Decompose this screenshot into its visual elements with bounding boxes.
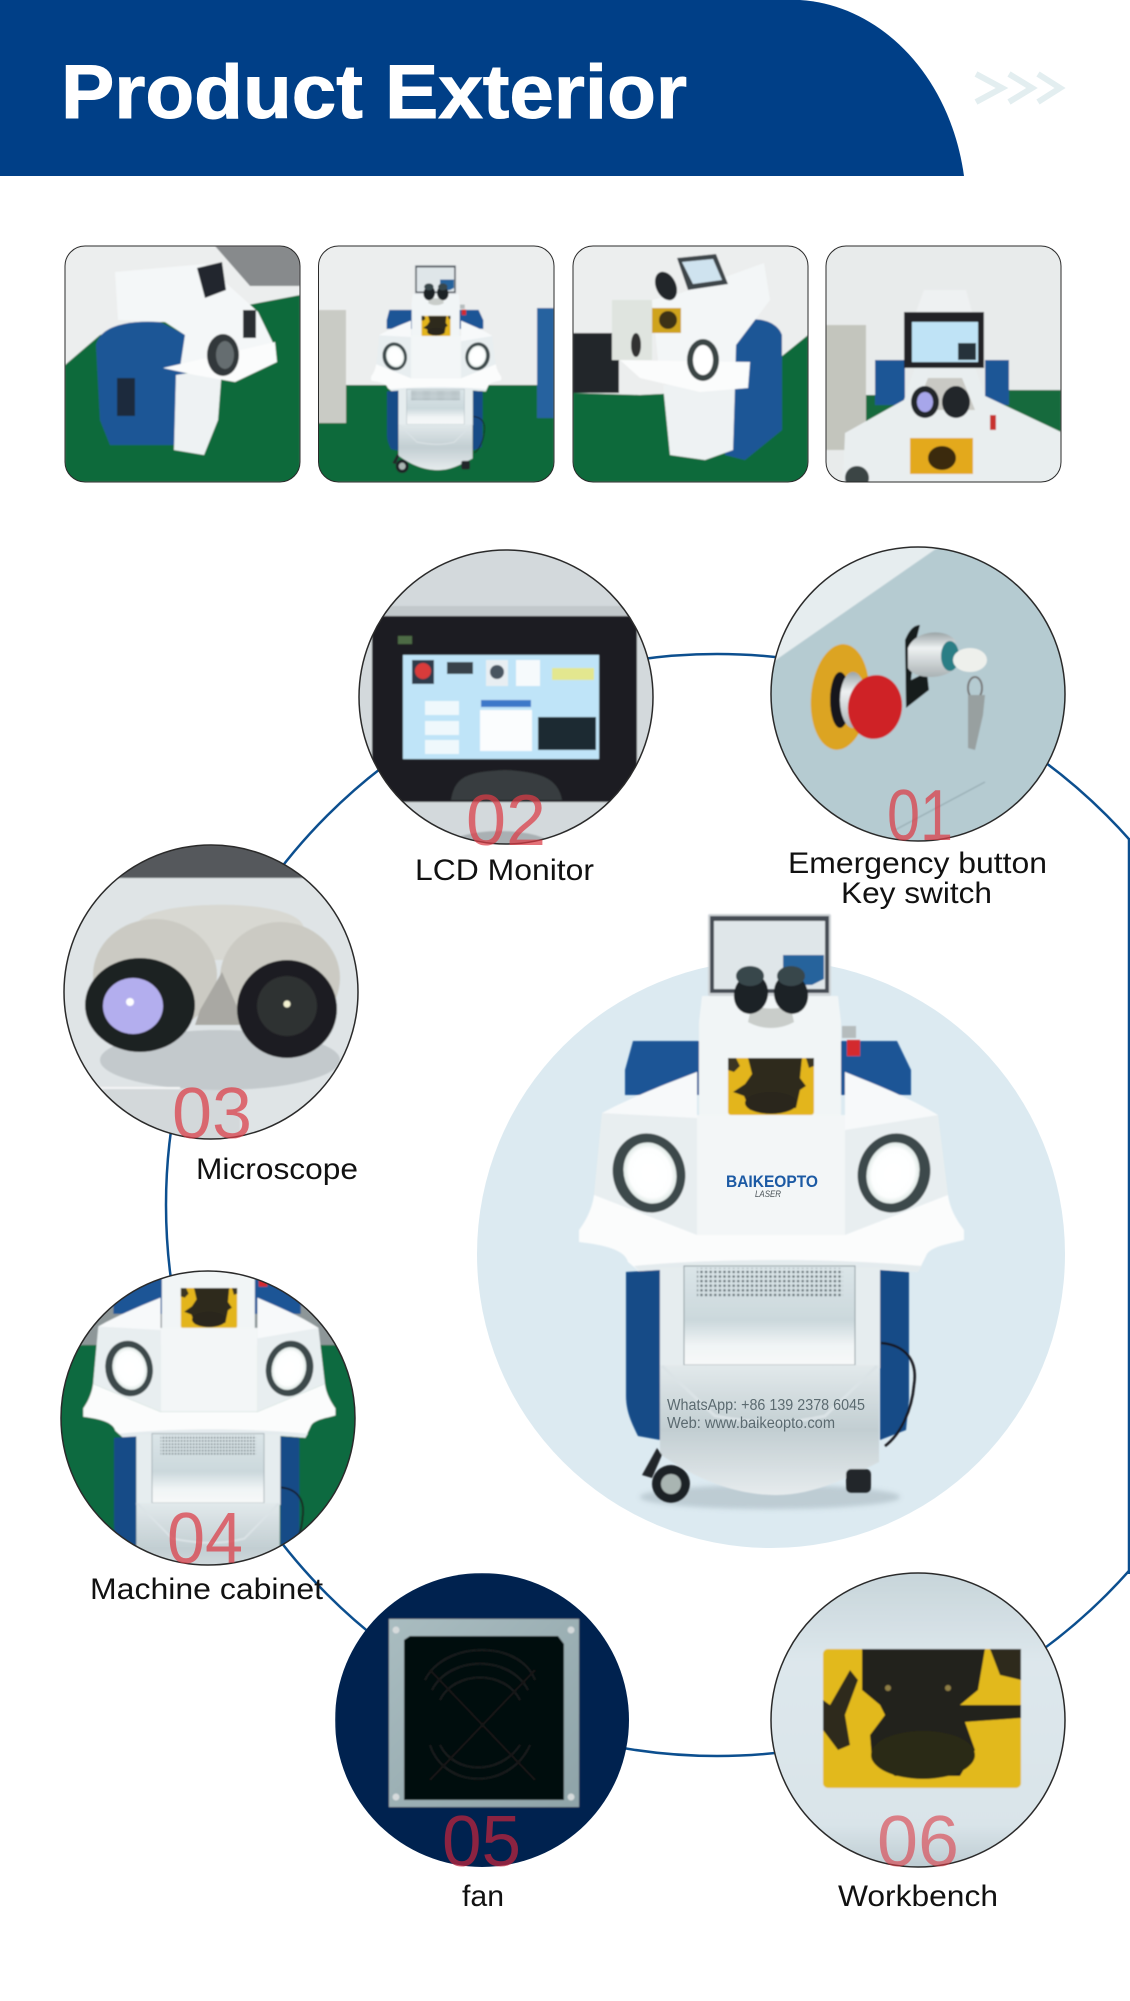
photo: machine close-up — [826, 246, 1061, 490]
label: Key switch — [841, 877, 992, 910]
number 02: 02 — [466, 781, 546, 861]
contact watermark: WhatsApp: +86 139 2378 6045 — [667, 1397, 865, 1414]
callout 01: emergency button and key switch — [770, 546, 1066, 910]
connecting ring line — [166, 654, 1130, 1756]
callout 02: LCD monitor — [358, 550, 654, 887]
label: Microscope — [196, 1153, 358, 1186]
photo strip — [65, 246, 1061, 490]
number 06: 06 — [877, 1802, 959, 1882]
label — [788, 847, 1047, 910]
callout 03: microscope — [64, 845, 359, 1186]
number 04: 04 — [167, 1499, 243, 1579]
machine brand logo — [726, 1172, 818, 1199]
callout 05: fan — [335, 1573, 631, 1913]
machine brand logo: LASER — [755, 1189, 781, 1199]
label: LCD Monitor — [415, 854, 594, 887]
machine brand logo: BAIKEOPTO — [726, 1172, 818, 1191]
pale backdrop circle — [477, 960, 1065, 1548]
number 01: 01 — [887, 776, 953, 856]
label: fan — [462, 1880, 504, 1913]
contact watermark: Web: www.baikeopto.com — [667, 1415, 835, 1432]
photo: machine front view — [318, 246, 554, 482]
header banner — [0, 0, 964, 176]
central product panel — [477, 914, 1065, 1548]
label: Emergency button — [788, 847, 1047, 880]
callout 04: machine cabinet — [60, 1270, 356, 1600]
product machine illustration — [579, 914, 964, 1509]
photo: machine side view left — [65, 246, 300, 482]
contact watermark — [667, 1397, 865, 1432]
number 03: 03 — [172, 1074, 252, 1154]
title: Product Exterior — [61, 50, 687, 135]
photo: machine angled view — [573, 246, 808, 482]
icon: chevron arrows — [976, 74, 1060, 102]
number 05: 05 — [442, 1802, 521, 1882]
label: Workbench — [838, 1880, 998, 1913]
label: Machine cabinet — [90, 1573, 324, 1606]
callout 06: workbench — [770, 1573, 1066, 1913]
